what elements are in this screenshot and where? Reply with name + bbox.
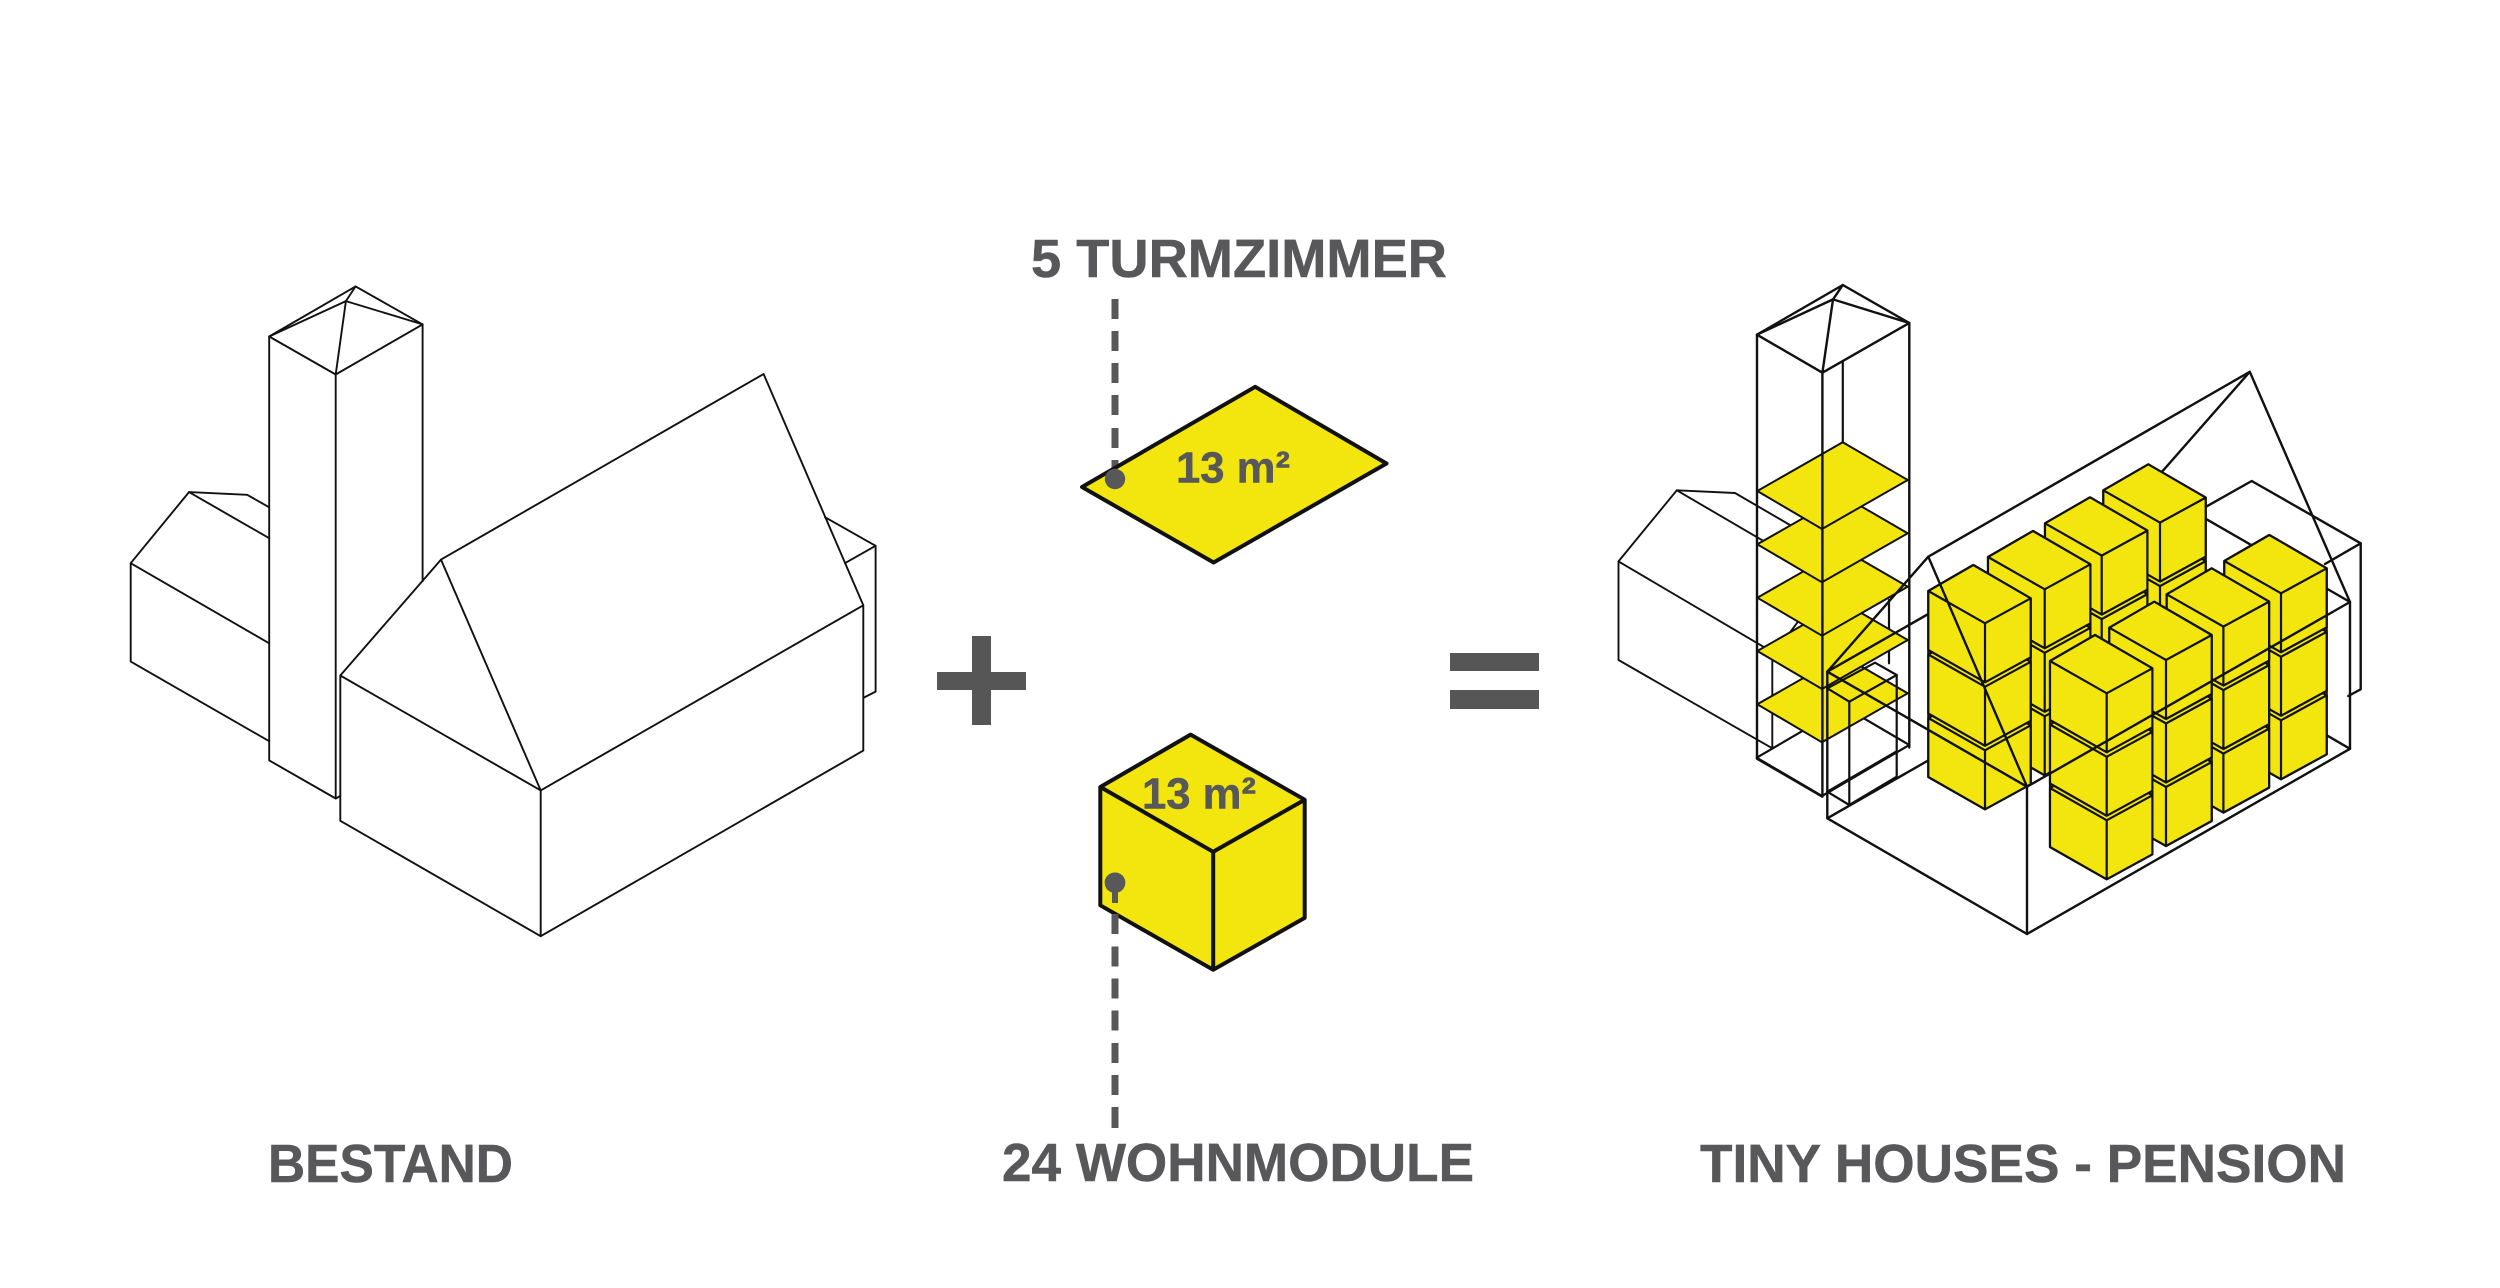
label: Bestand: BESTAND [268,1134,513,1194]
rear annex and back edges of hall [1827,372,2361,818]
small box in front of tower [1827,663,1897,805]
tower base and back edge [1757,362,1909,796]
label: 24 Wohnmodule: 24 WOHNMODULE [1002,1133,1474,1193]
diagram: Bestand existing building [131,286,876,936]
tower floor plates [1757,442,1908,742]
tower [269,286,423,798]
plus sign [937,636,1026,725]
equals sign [1450,653,1539,709]
area label: 13 m² [1142,770,1256,818]
tower outline [1757,285,1909,797]
side building outline [1618,490,1798,748]
label: Tiny Houses - Pension: TINY HOUSES - PENSION [1700,1134,2346,1194]
leader dot [1105,872,1125,903]
tower room leader line [1112,299,1118,475]
rear annex [825,517,876,697]
front row of module stacks [2050,535,2327,879]
label: 5 Turmzimmer: 5 TURMZIMMER [1031,229,1447,289]
main hall [340,374,863,936]
area label: 13 m² [1176,444,1290,492]
diagram: Tiny Houses combined building [1618,285,2361,934]
main hall outline [1827,372,2350,934]
side building [131,492,269,741]
leader dot [1105,469,1125,489]
tower room floor plate [1082,387,1386,562]
living module cube [1100,735,1305,970]
module leader line [1112,914,1118,1128]
back row of module stacks [1928,464,2206,809]
